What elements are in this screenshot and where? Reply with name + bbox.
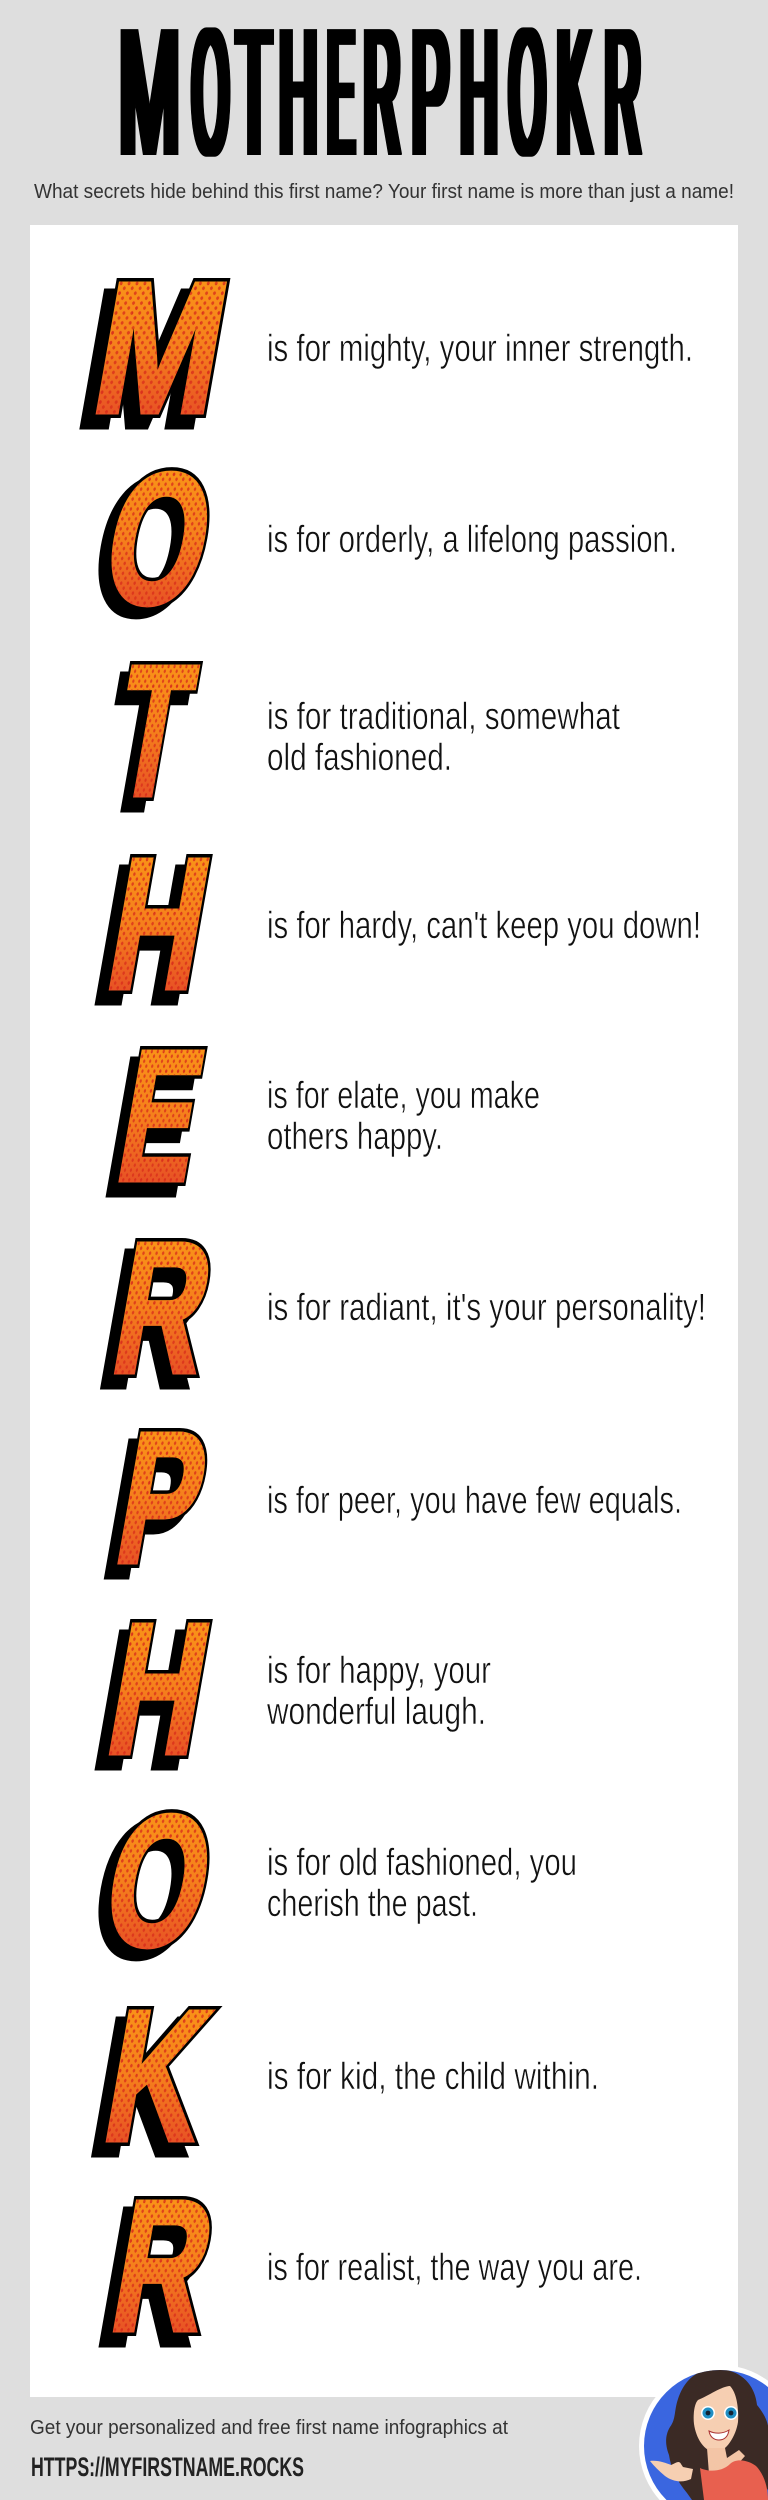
lines for H <box>266 1650 491 1733</box>
letter H: H <box>95 820 223 1029</box>
letter R: R <box>101 1204 226 1412</box>
letter O: O <box>92 1777 227 1986</box>
letter P: P <box>104 1395 220 1602</box>
letter M: M <box>69 256 229 463</box>
line for K: is for kid, the child within. <box>267 2056 599 2098</box>
letter H: H <box>95 820 223 1029</box>
letter O: O <box>92 435 227 644</box>
lines for T <box>267 696 620 779</box>
letter R: R <box>88 2173 216 2382</box>
letter O: O <box>92 435 227 644</box>
letter T: T <box>102 627 207 835</box>
subtitle: What secrets hide behind this first name? Your first name is more than just a name! <box>34 181 734 203</box>
letter R: R <box>99 2162 227 2371</box>
letter R: R <box>99 2162 227 2371</box>
letter E: E <box>96 1023 207 1231</box>
letter O: O <box>92 435 227 644</box>
icon: avatar of woman in blue circle <box>639 2365 768 2500</box>
lines for T: old fashioned. <box>267 737 452 779</box>
lines for E <box>267 1075 540 1158</box>
lines for E: others happy. <box>267 1116 443 1158</box>
letter E: E <box>106 1012 217 1220</box>
letter K: K <box>92 1973 223 2180</box>
letter T: T <box>102 627 207 835</box>
lines for E: is for elate, you make <box>267 1075 540 1117</box>
footer url: HTTPS://MYFIRSTNAME.ROCKS <box>31 2452 304 2482</box>
letter R: R <box>99 2162 227 2371</box>
letter M: M <box>81 245 241 452</box>
letter T: T <box>102 627 207 835</box>
letter O: O <box>92 1777 227 1986</box>
letter M: M <box>81 245 241 452</box>
letter H: H <box>95 820 223 1029</box>
letter H: H <box>84 831 212 1040</box>
letter T: T <box>92 638 197 846</box>
letter P: P <box>104 1395 220 1602</box>
letter H: H <box>84 1596 212 1805</box>
letter H: H <box>95 1585 223 1794</box>
lines for O <box>267 1842 577 1925</box>
letter K: K <box>92 1973 223 2180</box>
lines for H: is for happy, your <box>267 1650 491 1692</box>
letter K: K <box>81 1984 211 2191</box>
letter H: H <box>95 1585 223 1794</box>
letter E: E <box>106 1012 217 1220</box>
lines for O: cherish the past. <box>267 1883 478 1925</box>
letter O: O <box>92 1777 227 1986</box>
letter R: R <box>101 1204 226 1412</box>
letter O: O <box>81 443 217 652</box>
lines for H: wonderful laugh. <box>266 1691 486 1733</box>
letter H: H <box>95 1585 223 1794</box>
letter K: K <box>92 1973 223 2180</box>
letter M: M <box>81 245 241 452</box>
letter R: R <box>101 1204 226 1412</box>
letter R: R <box>90 1215 215 1423</box>
line for R: is for realist, the way you are. <box>267 2247 642 2289</box>
letter E: E <box>106 1012 217 1220</box>
letter O: O <box>81 1785 217 1994</box>
letter P: P <box>104 1395 220 1602</box>
lines for O: is for old fashioned, you <box>267 1842 577 1884</box>
footer prompt: Get your personalized and free first name infographics at <box>30 2417 508 2439</box>
lines for T: is for traditional, somewhat <box>267 696 620 738</box>
letter P: P <box>94 1406 210 1613</box>
